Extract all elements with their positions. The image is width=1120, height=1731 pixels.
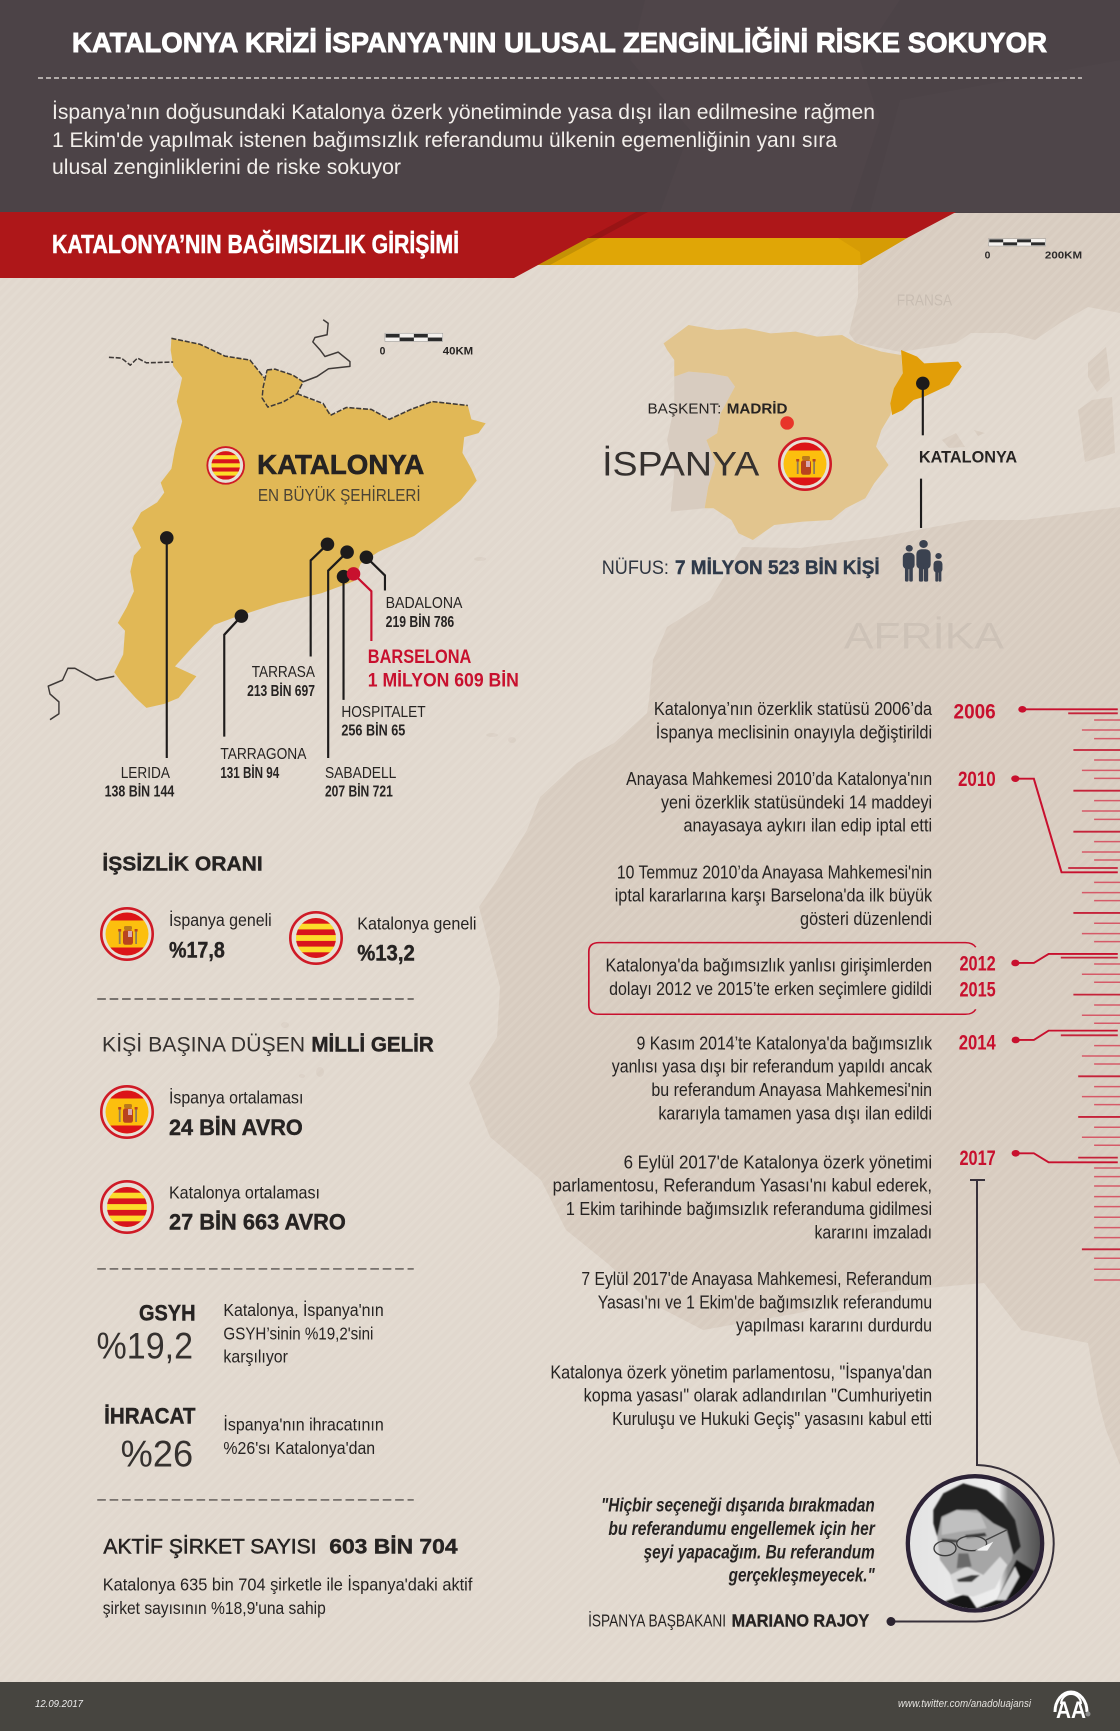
Spain income: 24 BİN AVRO [169, 1115, 303, 1140]
event secession law [550, 1361, 932, 1430]
logo: Anadolu Agency: AA [1056, 1697, 1086, 1724]
population text [602, 557, 880, 579]
twitter link text: www.twitter.com/anadoluajansi [898, 1698, 1031, 1710]
region shape [114, 338, 486, 708]
event 2014 [612, 1033, 932, 1124]
Portugal [667, 372, 735, 512]
map: Spain [602, 239, 1082, 657]
event 2010 [626, 769, 932, 836]
event 2010: yeni özerklik statüsündeki 14 maddeyi [661, 792, 932, 813]
Spain unemployment [169, 909, 272, 962]
population text: NÜFUS: [602, 558, 669, 579]
map scale [380, 333, 473, 358]
event 2010: Anayasa Mahkemesi 2010’da Katalonya'nın [626, 769, 932, 790]
city labels: TARRASA [252, 664, 315, 681]
Catalonia income [169, 1182, 346, 1234]
date: 12.09.2017 [35, 1698, 84, 1710]
city labels: 256 BİN 65 [341, 722, 405, 740]
capital dot [780, 416, 794, 430]
population text: 7 MİLYON 523 BİN KİŞİ [675, 557, 880, 579]
timeline dots [1011, 706, 1026, 1157]
event secession law: kopma yasası" olarak adlandırılan "Cumhuriyetin [584, 1386, 932, 1406]
AFRIKA label: AFRİKA [844, 615, 1004, 657]
event 2014: yanlısı yasa dışı bir referandum yapıldı ancak [612, 1057, 932, 1077]
GDP stat [97, 1301, 196, 1367]
quote: "Hiçbir seçeneği dışarıda bırakmadan [601, 1496, 875, 1516]
income heading: KİŞİ BAŞINA DÜŞEN [102, 1032, 305, 1057]
city labels: 219 BİN 786 [386, 613, 454, 631]
city connector lines [167, 538, 385, 758]
highlight box 2012-2015: Katalonya'da bağımsızlık yanlısı girişimlerden [605, 956, 932, 976]
city labels: HOSPITALET [341, 704, 426, 721]
event 2014: kararıyla tamamen yasa dışı ilan edildi [658, 1103, 932, 1124]
city labels: LERIDA [121, 766, 170, 782]
city labels: 131 BİN 94 [220, 764, 280, 782]
footer [0, 1682, 1120, 1731]
Spain unemployment: İspanya geneli [169, 909, 272, 930]
event 6 Sept 2017: parlamentosu, Referandum Yasası'nı kabul ederek, [553, 1176, 932, 1196]
intro text: İspanya’nın doğusundaki Katalonya özerk yönetiminde yasa dışı ilan edilmesine rağmen [52, 100, 875, 124]
event 2014: bu referandum Anayasa Mahkemesi'nin [651, 1080, 932, 1101]
intro text [52, 100, 875, 179]
FRANSA label: FRANSA [897, 293, 952, 310]
quote: gerçekleşmeyecek." [728, 1566, 875, 1586]
year labels: 2006 [954, 699, 996, 723]
event 6 Sept 2017 [553, 1152, 932, 1243]
companies text: Katalonya 635 bin 704 şirketle ile İspanya'daki aktif [103, 1574, 473, 1595]
event July 2010: gösteri düzenlendi [800, 909, 932, 930]
quote: bu referandumu engellemek için her [608, 1519, 876, 1540]
map subtitle: EN BÜYÜK ŞEHİRLERİ [258, 485, 421, 505]
Barcelona label: 1 MİLYON 609 BİN [368, 669, 519, 691]
highlight box 2012-2015: dolayı 2012 ve 2015’te erken seçimlere gidildi [609, 979, 932, 1000]
capital label: MADRİD [727, 401, 787, 417]
map title: KATALONYA [257, 449, 424, 480]
Andorra area [262, 369, 303, 407]
event 6 Sept 2017: kararını imzaladı [814, 1222, 932, 1243]
portrait: Mariano Rajoy [906, 1474, 1044, 1613]
Spain shape [664, 325, 903, 540]
event 7 Sept 2017: yapılması kararını durdurdu [736, 1316, 932, 1336]
year labels: 2017 [959, 1146, 996, 1170]
GDP text [223, 1299, 384, 1367]
export stat: %26 [121, 1434, 193, 1475]
title: KATALONYA KRİZİ İSPANYA'NIN ULUSAL ZENGİNLİĞİNİ RİSKE SOKUYOR [72, 27, 1047, 58]
quote attribution: İSPANYA BAŞBAKANI [588, 1611, 726, 1630]
map scale: 0 [985, 251, 991, 261]
export text: %26'sı Katalonya'dan [223, 1437, 375, 1458]
intro text: 1 Ekim'de yapılmak istenen bağımsızlık referandumu ülkenin egemenliğinin yanı sıra [52, 128, 837, 152]
Catalonia unemployment: %13,2 [357, 941, 415, 966]
year labels: 2012 [959, 952, 996, 975]
companies text [103, 1574, 473, 1618]
connector end dot [886, 1617, 896, 1626]
income heading [102, 1032, 434, 1057]
GDP stat: %19,2 [97, 1326, 193, 1367]
year labels: 2014 [959, 1030, 996, 1054]
quote attribution [588, 1611, 869, 1630]
event 2006: Katalonya’nın özerklik statüsü 2006’da [654, 699, 932, 720]
event 6 Sept 2017: 6 Eylül 2017'de Katalonya özerk yönetimi [624, 1152, 932, 1173]
city labels: SABADELL [325, 766, 396, 782]
event 2006: İspanya meclisinin onayıyla değiştirildi [656, 721, 932, 743]
companies heading: 603 BİN 704 [329, 1534, 458, 1558]
GDP text: GSYH’sinin %19,2'sini [223, 1323, 373, 1343]
left panel: unemployment [97, 853, 477, 1269]
event July 2010 [615, 862, 932, 930]
Catalonia pointer [916, 377, 930, 435]
year labels: 2010 [958, 767, 996, 791]
map scale: 200KM [1045, 251, 1082, 261]
icon: Spanish flag, unemployment [101, 908, 153, 960]
event 6 Sept 2017: 1 Ekim tarihinde bağımsızlık referanduma gidilmesi [566, 1199, 932, 1220]
section banner [0, 212, 956, 278]
quote: şeyi yapacağım. Bu referandum [644, 1542, 875, 1563]
Barcelona label [368, 645, 519, 691]
income heading: MİLLİ GELİR [311, 1032, 434, 1057]
event 7 Sept 2017: 7 Eylül 2017'de Anayasa Mahkemesi, Referandum [581, 1269, 932, 1290]
year labels [954, 699, 996, 1170]
Catalonia shape [890, 350, 962, 415]
icon: Catalan flag, map title [207, 447, 244, 484]
capital label [647, 401, 787, 417]
event July 2010: iptal kararlarına karşı Barselona'da ilk büyük [615, 886, 932, 906]
map scale: 40KM [443, 345, 473, 358]
quote attribution: MARIANO RAJOY [732, 1611, 869, 1630]
year labels: 2015 [959, 978, 996, 1001]
city labels: 207 BİN 721 [325, 783, 393, 801]
Catalonia label: KATALONYA [919, 447, 1018, 466]
capital label: BAŞKENT: [647, 401, 721, 417]
export stat [104, 1404, 196, 1475]
event 2006 [654, 699, 932, 743]
event 2014: 9 Kasım 2014’te Katalonya'da bağımsızlık [637, 1033, 932, 1054]
companies text: şirket sayısının %18,9'una sahip [103, 1597, 326, 1618]
heading: İŞSİZLİK ORANI [102, 853, 263, 876]
city labels [105, 595, 463, 801]
icon: Spanish flag, map [779, 438, 831, 490]
export text: İspanya'nın ihracatının [223, 1414, 384, 1435]
city labels: 138 BİN 144 [105, 783, 175, 801]
icon: Catalan flag, income [101, 1181, 153, 1233]
timeline ruler strong ticks [1061, 713, 1120, 1249]
country name: İSPANYA [602, 443, 759, 483]
quote [588, 1496, 876, 1630]
event 7 Sept 2017 [581, 1269, 932, 1336]
icon: Catalan flag, unemployment [290, 912, 342, 964]
Spain income: İspanya ortalaması [169, 1087, 303, 1107]
GDP text: karşılıyor [223, 1346, 288, 1367]
Catalonia unemployment [357, 913, 477, 966]
export text [223, 1414, 384, 1458]
city dots [160, 531, 373, 623]
city labels: 213 BİN 697 [247, 682, 315, 700]
companies heading [103, 1534, 458, 1558]
Catalonia income: 27 BİN 663 AVRO [169, 1210, 346, 1234]
city labels: TARRAGONA [220, 746, 307, 763]
export stat: İHRACAT [104, 1404, 196, 1428]
event 7 Sept 2017: Yasası'nı ve 1 Ekim'de bağımsızlık referandumu [598, 1292, 932, 1313]
event July 2010: 10 Temmuz 2010’da Anayasa Mahkemesi'nin [617, 862, 932, 883]
icon: Spanish flag, income [101, 1086, 153, 1138]
Catalonia unemployment: Katalonya geneli [357, 913, 477, 933]
intro text: ulusal zenginliklerini de riske sokuyor [52, 155, 401, 179]
Spain income [169, 1087, 303, 1140]
city labels: BADALONA [386, 595, 463, 612]
map scale [985, 239, 1082, 261]
event secession law: Kuruluşu ve Hukuki Geçiş" yasasını kabul etti [612, 1409, 932, 1430]
quote connector [891, 1180, 1054, 1622]
map scale: 0 [380, 345, 385, 358]
event secession law: Katalonya özerk yönetim parlamentosu, "İspanya'dan [550, 1361, 932, 1383]
Barcelona label: BARSELONA [368, 645, 471, 667]
GDP text: Katalonya, İspanya'nın [223, 1299, 384, 1320]
header panel [0, 0, 1120, 213]
left panel: economy stats [97, 1299, 473, 1618]
timeline connectors [1015, 709, 1118, 1162]
Catalonia income: Katalonya ortalaması [169, 1182, 320, 1202]
companies heading: AKTİF ŞİRKET SAYISI [103, 1534, 317, 1558]
event 2010: anayasaya aykırı ilan edip iptal etti [684, 816, 932, 836]
borders [48, 320, 468, 720]
section heading: KATALONYA’NIN BAĞIMSIZLIK GİRİŞİMİ [52, 229, 459, 259]
GDP stat: GSYH [139, 1301, 196, 1326]
timeline [550, 699, 1120, 1430]
icon: people [903, 540, 942, 582]
map: Catalonia [48, 320, 519, 801]
highlight box 2012-2015 [589, 943, 976, 1014]
timeline ruler light ticks [1082, 720, 1120, 1280]
Spain unemployment: %17,8 [169, 938, 225, 962]
